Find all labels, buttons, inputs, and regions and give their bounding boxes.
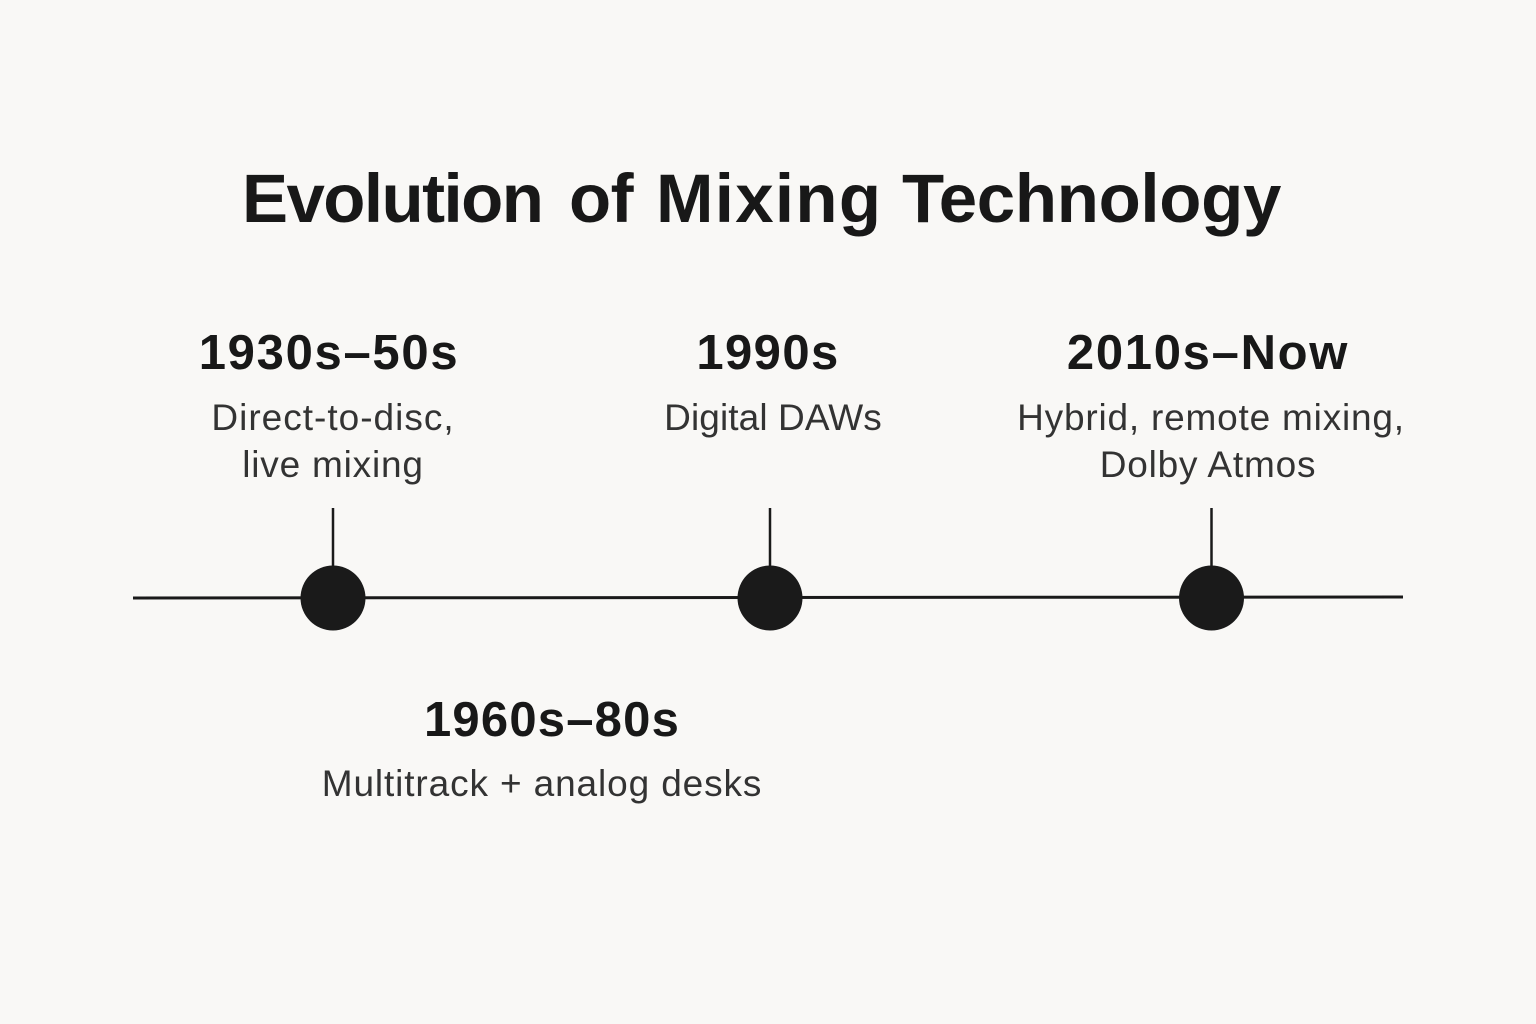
- timeline axis: [133, 597, 1403, 598]
- heading: 1990s: 1990s: [696, 326, 840, 380]
- title: of: [569, 160, 633, 237]
- title: Mixing: [656, 160, 882, 237]
- marker: 2010s–Now: [1179, 508, 1244, 630]
- heading: 1960s–80s: 1960s–80s: [424, 693, 680, 747]
- text: 1930s–50s description: Direct-to-disc,: [211, 397, 455, 438]
- text: 1960s–80s description: Multitrack + analog desks: [322, 763, 762, 804]
- text: 2010s–Now description: Hybrid, remote mixing,: [1017, 397, 1405, 438]
- title: Technology: [902, 160, 1281, 237]
- heading: 2010s–Now: 2010s–Now: [1067, 326, 1349, 380]
- text: 1930s–50s description: [211, 397, 455, 485]
- text: 1990s description: Digital DAWs: [664, 397, 882, 438]
- text: 1930s–50s description: live mixing: [242, 444, 424, 485]
- marker: 1930s–50s: [300, 508, 366, 630]
- marker: 1990s: [738, 508, 802, 630]
- title: [242, 160, 1281, 237]
- title: Evolution: [242, 160, 542, 237]
- heading: 1930s–50s: 1930s–50s: [199, 326, 459, 380]
- text: 2010s–Now description: [1017, 397, 1405, 485]
- text: 2010s–Now description: Dolby Atmos: [1100, 444, 1316, 485]
